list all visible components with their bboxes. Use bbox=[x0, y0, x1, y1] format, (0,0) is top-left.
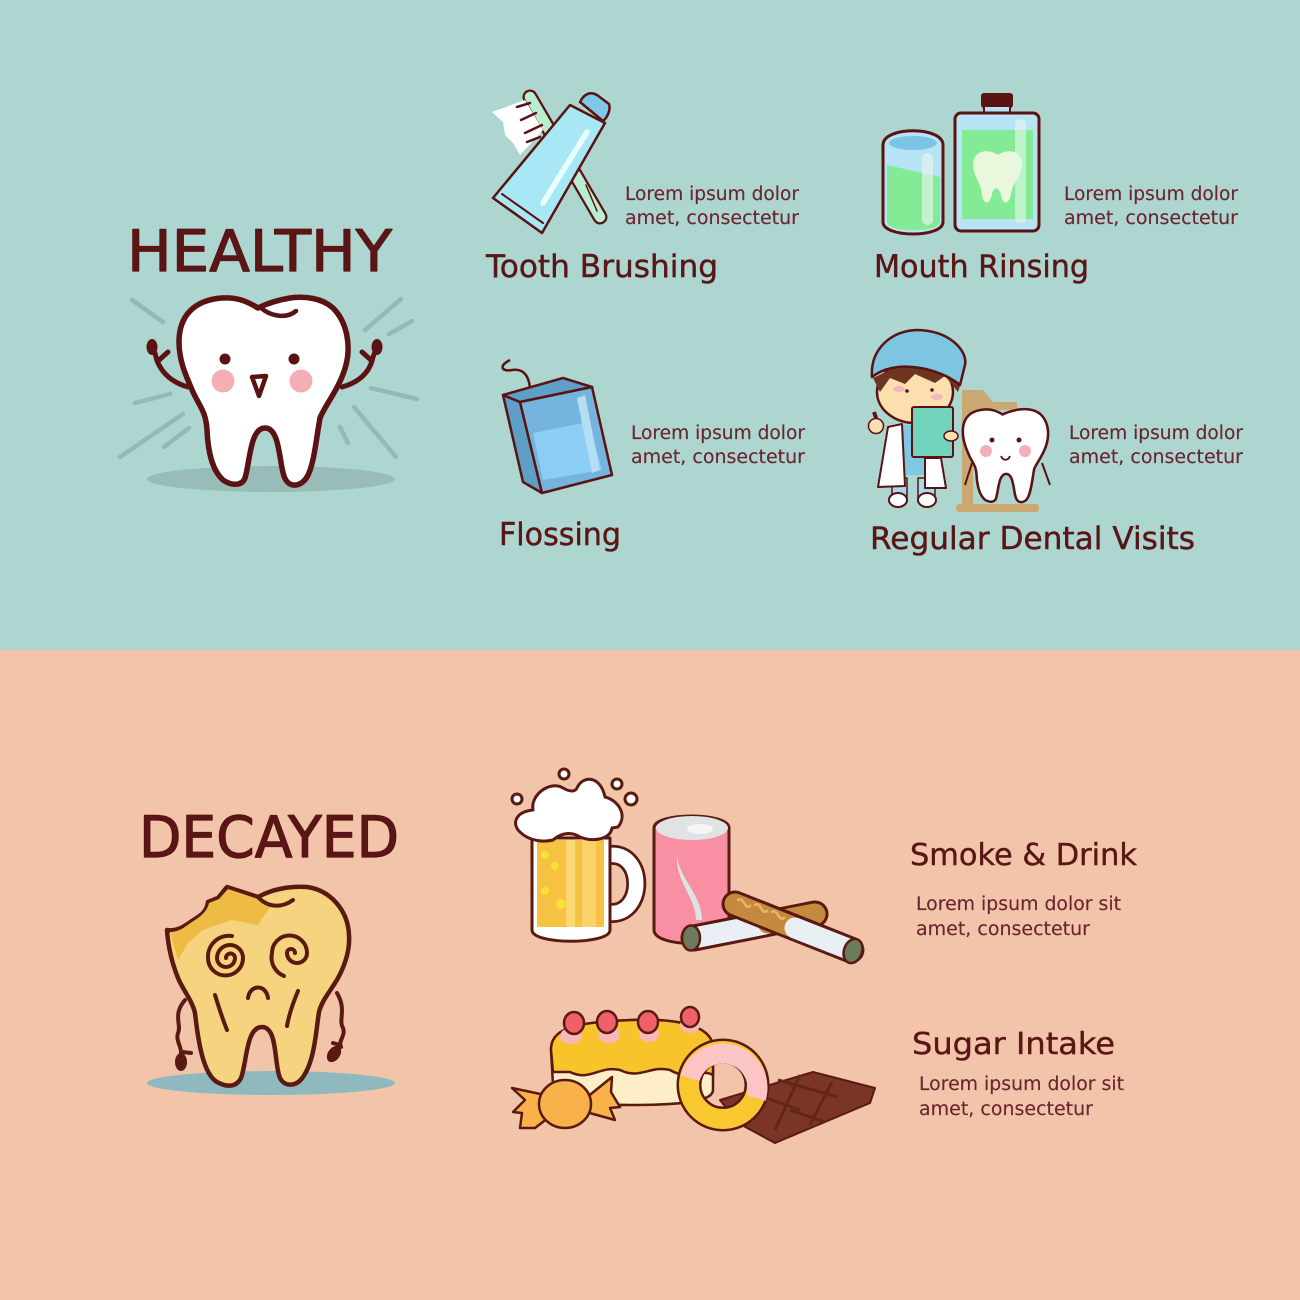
text: sugar intake: amet, consectetur bbox=[919, 1099, 1093, 1120]
text: sugar intake: Lorem ipsum dolor sit bbox=[919, 1074, 1124, 1095]
icon: healthy tooth character bbox=[120, 297, 417, 492]
icon: candy bbox=[512, 1077, 620, 1128]
text: smoke and drink: Smoke & Drink bbox=[910, 838, 1138, 873]
icon: cake bbox=[551, 1007, 713, 1105]
text: smoke and drink: Lorem ipsum dolor sit bbox=[916, 894, 1121, 915]
text: flossing description: Lorem ipsum dolor bbox=[631, 423, 805, 444]
icon: chocolate bar bbox=[720, 1072, 875, 1143]
heading: decayed: DECAYED bbox=[139, 805, 399, 871]
icon: donut bbox=[689, 1051, 757, 1119]
text: flossing description: amet, consectetur bbox=[631, 447, 805, 468]
icon: cigarettes bbox=[682, 899, 866, 966]
text: dental visits description bbox=[1069, 423, 1243, 468]
label: regular dental visits: Regular Dental Visits bbox=[870, 521, 1195, 557]
text: dental visits description: Lorem ipsum dolor bbox=[1069, 423, 1243, 444]
text: tooth brushing description: Lorem ipsum dolor bbox=[625, 184, 799, 205]
label: flossing: Flossing bbox=[499, 517, 621, 553]
heading: healthy: HEALTHY bbox=[127, 219, 392, 285]
panel: healthy habits bbox=[0, 0, 1300, 650]
icon: soda can bbox=[654, 816, 729, 944]
icon: decayed tooth character bbox=[147, 887, 395, 1095]
icon: toothbrush and toothpaste bbox=[492, 93, 610, 233]
panel: decay causes bbox=[0, 650, 1300, 1300]
label: tooth brushing: Tooth Brushing bbox=[485, 249, 718, 285]
label: mouth rinsing: Mouth Rinsing bbox=[874, 249, 1089, 285]
icon: mouthwash glass and bottle bbox=[883, 93, 1039, 234]
icon: beer mug bbox=[512, 769, 637, 941]
text: sugar intake bbox=[912, 1027, 1124, 1120]
text: mouth rinsing description: Lorem ipsum dolor bbox=[1064, 184, 1238, 205]
text: mouth rinsing description bbox=[1064, 184, 1238, 229]
text: smoke and drink: amet, consectetur bbox=[916, 919, 1090, 940]
text: dental visits description: amet, consectetur bbox=[1069, 447, 1243, 468]
text: smoke and drink bbox=[910, 838, 1138, 940]
icon: dental floss box bbox=[503, 360, 612, 493]
text: sugar intake: Sugar Intake bbox=[912, 1027, 1115, 1062]
icon: dentist with tooth bbox=[868, 330, 1050, 512]
text: tooth brushing description: amet, consectetur bbox=[625, 208, 799, 229]
text: tooth brushing description bbox=[625, 184, 799, 229]
text: flossing description bbox=[631, 423, 805, 468]
text: mouth rinsing description: amet, consectetur bbox=[1064, 208, 1238, 229]
